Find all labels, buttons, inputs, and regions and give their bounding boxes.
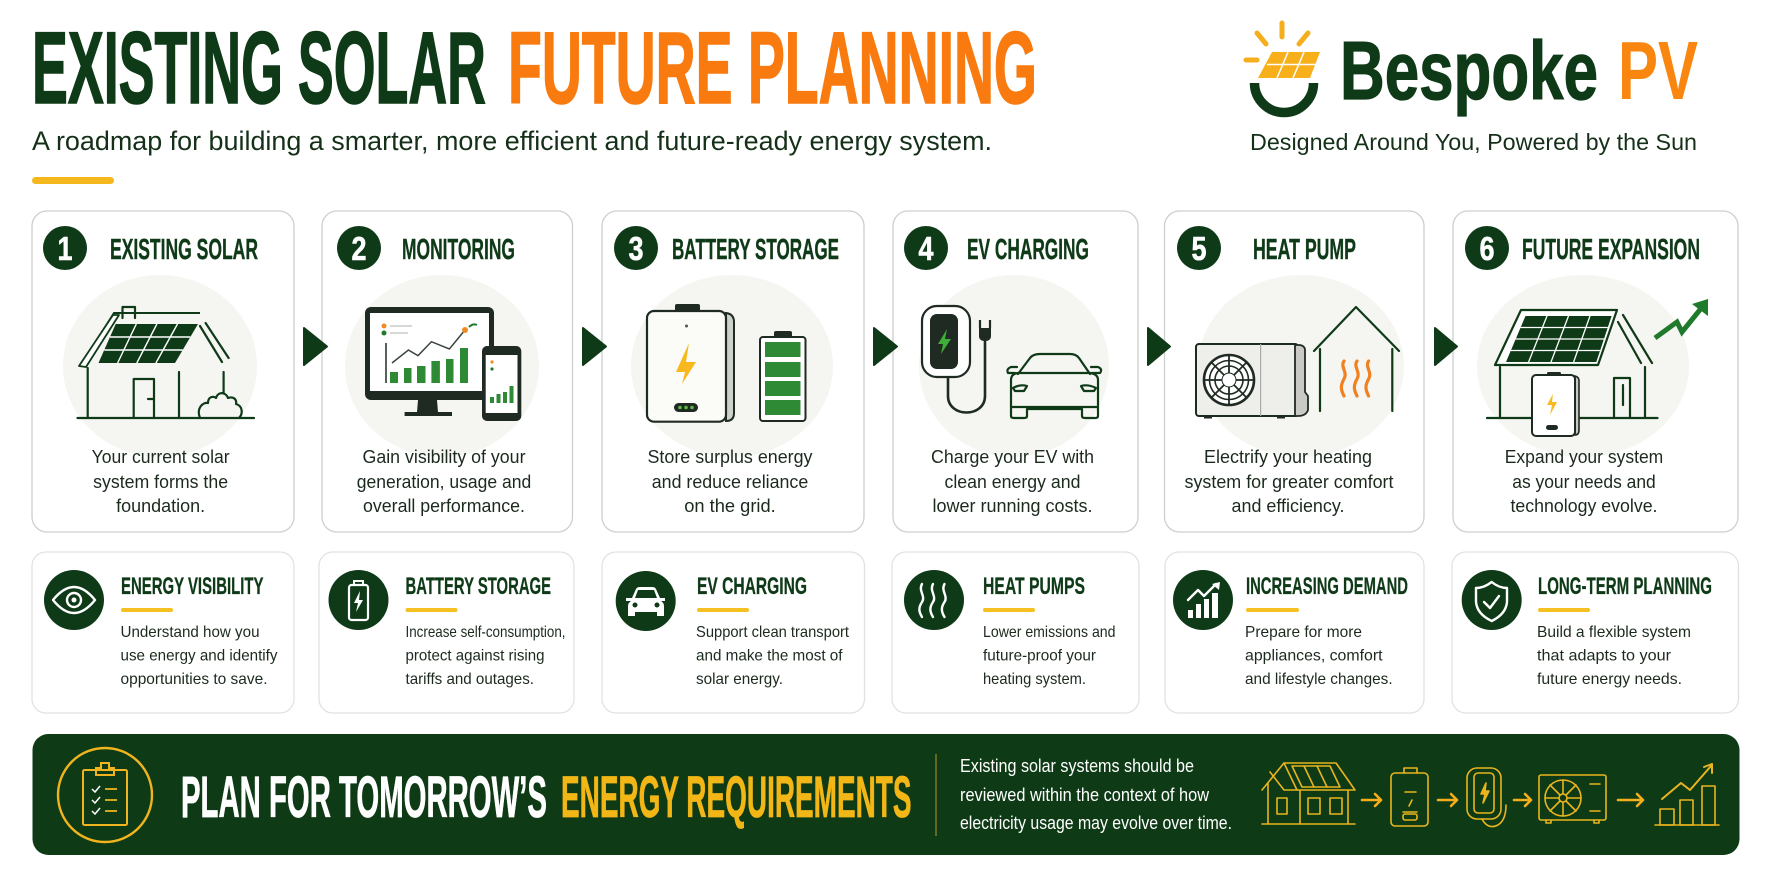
icon: battery: [1391, 768, 1428, 826]
icon row: upgrade pathway: [1262, 763, 1719, 827]
description: opportunities to save.: [120, 671, 268, 688]
panel: step 3 battery storage: [602, 211, 864, 532]
step number 4: [904, 226, 948, 270]
description: clean energy and: [944, 471, 1080, 492]
description: tariffs and outages.: [406, 671, 534, 688]
arrow: [1618, 794, 1643, 806]
panel: step 4 EV charging: [893, 211, 1138, 532]
description: [983, 624, 1116, 688]
wordmark: PV: [1618, 24, 1698, 117]
description: and lifestyle changes.: [1245, 671, 1393, 688]
step number 4: 4: [918, 230, 934, 267]
heading: EXISTING SOLAR: [110, 234, 258, 266]
icon: eye: [44, 570, 104, 630]
banner heading: PLAN FOR TOMORROW’S: [181, 765, 547, 830]
icon: charger: [1467, 768, 1506, 827]
icon: home battery and charge level: [647, 304, 806, 422]
heading: INCREASING DEMAND: [1246, 573, 1408, 600]
icon: monitor and phone dashboard: [365, 307, 521, 421]
heading: HEAT PUMP: [1253, 234, 1356, 266]
icon: heat pump: [1539, 775, 1606, 823]
description: Lower emissions and: [983, 624, 1116, 641]
heading: BATTERY STORAGE: [672, 234, 839, 266]
icon: clipboard checklist: [58, 748, 152, 842]
panel: bottom banner: ENERGY REQUIREMENTS: [561, 765, 912, 830]
step number 5: [1177, 226, 1221, 270]
step number 5: 5: [1192, 230, 1206, 267]
panel: step 5 heat pump: [1164, 211, 1424, 532]
description: [1537, 624, 1691, 688]
tagline: Designed Around You, Powered by the Sun: [1250, 129, 1697, 155]
icon: sun and solar panel smile: [1246, 23, 1320, 112]
heading: EV CHARGING: [967, 234, 1089, 266]
heading: ENERGY VISIBILITY: [121, 573, 264, 600]
description: [931, 446, 1094, 516]
banner text: [960, 755, 1232, 833]
step number 6: [1465, 226, 1509, 270]
wordmark: Bespoke: [1340, 24, 1598, 117]
arrow: [1438, 794, 1457, 806]
description: Build a flexible system: [1537, 624, 1691, 641]
description: system for greater comfort: [1184, 471, 1394, 492]
icon: heat pump unit and house: [1196, 307, 1399, 417]
description: [696, 624, 850, 688]
description: [1245, 624, 1393, 688]
icon: heat waves: [904, 570, 964, 630]
description: and efficiency.: [1232, 495, 1344, 516]
icon: house with solar, battery and growth arrow: [1487, 299, 1708, 436]
arrow: [1514, 794, 1531, 806]
description: [406, 624, 566, 688]
description: and reduce reliance: [652, 471, 808, 492]
description: and make the most of: [696, 648, 843, 664]
description: [357, 446, 531, 516]
description: Understand how you: [120, 624, 260, 641]
description: protect against rising: [406, 648, 544, 664]
icon: house: [1262, 763, 1355, 824]
logo: Bespoke PV: [1246, 23, 1698, 155]
banner text: Existing solar systems should be: [960, 755, 1194, 776]
panel: increasing demand: [1165, 552, 1424, 713]
description: that adapts to your: [1537, 648, 1672, 664]
step number 3: 3: [628, 230, 644, 267]
heading: BATTERY STORAGE: [406, 573, 551, 600]
arrow: step 2 to 3: [583, 328, 606, 365]
heading: HEAT PUMPS: [983, 573, 1085, 600]
heading: EV CHARGING: [697, 573, 807, 600]
description: foundation.: [116, 495, 205, 516]
description: lower running costs.: [932, 495, 1092, 516]
description: system forms the: [93, 471, 228, 492]
step number 3: [614, 226, 658, 270]
description: Increase self-consumption,: [406, 624, 566, 641]
panel: step 2 monitoring: [322, 211, 572, 532]
description: [1184, 446, 1394, 516]
panel: bottom banner: [32, 734, 1740, 855]
description: Your current solar: [92, 446, 230, 467]
arrow: step 4 to 5: [1148, 328, 1170, 365]
description: Prepare for more: [1245, 624, 1362, 641]
panel: heat pumps benefit: [892, 552, 1139, 713]
icon: growth chart: [1173, 570, 1233, 630]
description: Store surplus energy: [648, 446, 813, 467]
step number 2: 2: [352, 230, 366, 267]
arrow: [1362, 794, 1381, 806]
title: FUTURE PLANNING: [508, 11, 1037, 125]
step number 1: 1: [58, 230, 72, 267]
panel: long-term planning: [1452, 552, 1738, 713]
step number 1: [43, 226, 87, 270]
description: on the grid.: [684, 495, 776, 516]
arrow: step 3 to 4: [874, 328, 897, 365]
heading: MONITORING: [402, 234, 515, 266]
description: technology evolve.: [1510, 495, 1658, 516]
description: as your needs and: [1512, 471, 1656, 492]
description: [120, 624, 278, 688]
arrow: step 1 to 2: [304, 328, 327, 365]
panel: energy visibility: [32, 552, 294, 713]
icon: car: [616, 571, 676, 631]
description: overall performance.: [363, 495, 525, 516]
description: solar energy.: [696, 671, 783, 688]
description: Gain visibility of your: [362, 446, 526, 467]
icon: shield with check: [1462, 570, 1522, 630]
description: heating system.: [983, 671, 1086, 688]
description: future energy needs.: [1537, 671, 1682, 688]
description: [1505, 446, 1663, 516]
banner text: reviewed within the context of how: [960, 784, 1210, 805]
description: Electrify your heating: [1204, 446, 1372, 467]
accent bar: [32, 177, 114, 184]
description: [92, 446, 230, 516]
step number 6: 6: [1480, 230, 1494, 267]
description: use energy and identify: [120, 648, 278, 664]
description: Support clean transport: [696, 624, 850, 641]
description: Expand your system: [1505, 446, 1663, 467]
panel: step 6 future expansion: [1453, 211, 1738, 532]
step number 2: [337, 226, 381, 270]
description: Charge your EV with: [931, 446, 1094, 467]
icon: house with solar panels: [78, 307, 254, 418]
description: generation, usage and: [357, 471, 531, 492]
arrow: step 5 to 6: [1435, 328, 1457, 365]
panel: step 1 existing solar: [32, 211, 294, 532]
description: [648, 446, 813, 516]
panel: battery storage benefit: [319, 552, 574, 713]
banner text: electricity usage may evolve over time.: [960, 812, 1232, 833]
title: EXISTING SOLAR: [32, 11, 486, 125]
icon: EV charger and car: [922, 306, 1101, 418]
description: future-proof your: [983, 648, 1097, 664]
icon: growth chart: [1655, 764, 1719, 825]
subtitle: A roadmap for building a smarter, more efficient and future-ready energy system.: [32, 126, 992, 156]
description: appliances, comfort: [1245, 648, 1383, 664]
panel: EV charging benefit: [602, 552, 864, 713]
icon: battery: [328, 570, 388, 630]
